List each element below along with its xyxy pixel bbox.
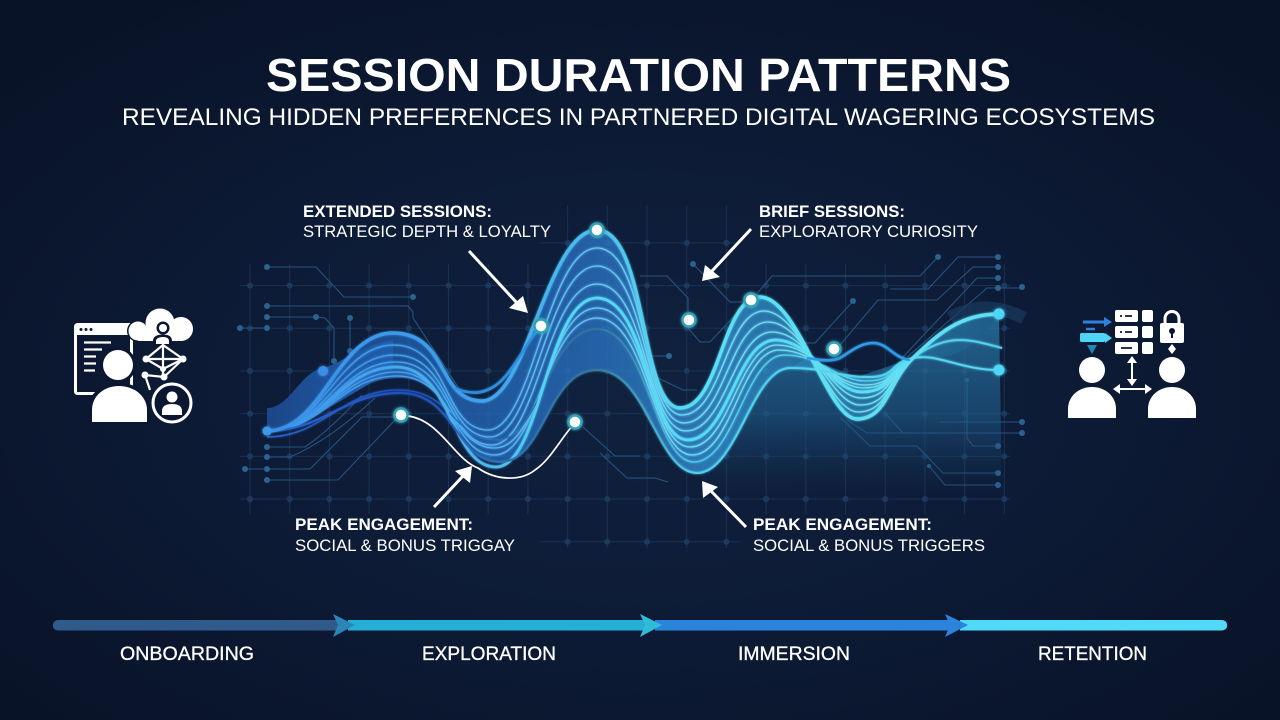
icon: users with data servers and lock: [1068, 310, 1196, 418]
callout: peak engagement right: PEAK ENGAGEMENT:: [753, 515, 932, 534]
callout: extended sessions: EXTENDED SESSIONS:: [303, 202, 492, 221]
icon: user with browser, cloud and network: [75, 308, 193, 424]
arrow: extended sessions: [469, 251, 528, 313]
left dark shape: [267, 340, 393, 431]
stage bar: exploration: [348, 614, 662, 637]
callout: peak engagement right: [753, 515, 985, 555]
stage bar: onboarding: [53, 614, 355, 637]
stage label: exploration: EXPLORATION: [422, 643, 556, 665]
right area glow: [950, 308, 1024, 318]
callout: peak engagement left: [295, 515, 515, 555]
callout: peak engagement right: SOCIAL & BONUS TRIGGERS: [753, 536, 985, 555]
circuit traces: [237, 254, 1025, 488]
arrow: peak engagement left: [434, 466, 472, 507]
stage label: immersion: IMMERSION: [738, 643, 850, 665]
data nodes: [262, 224, 1004, 436]
timeline: stage progression: [53, 614, 1227, 665]
callout: extended sessions: [303, 202, 551, 241]
chart: session duration waves: [237, 205, 1025, 548]
callout: extended sessions: STRATEGIC DEPTH & LOYALTY: [303, 222, 551, 241]
callout: brief sessions: BRIEF SESSIONS:: [759, 202, 905, 221]
wave lines: [267, 230, 1002, 473]
stage label: retention: RETENTION: [1038, 643, 1147, 665]
arrow: brief sessions: [702, 229, 751, 281]
callout: peak engagement left: PEAK ENGAGEMENT:: [295, 515, 473, 534]
title: SESSION DURATION PATTERNS: [266, 49, 1011, 101]
callout: brief sessions: EXPLORATORY CURIOSITY: [759, 222, 978, 241]
stage label: onboarding: ONBOARDING: [120, 643, 254, 665]
callout: brief sessions: [759, 202, 978, 241]
stage bar: retention: [960, 620, 1227, 630]
subtitle: REVEALING HIDDEN PREFERENCES IN PARTNERED DIGITAL WAGERING ECOSYSTEMS: [122, 104, 1155, 131]
stage bar: immersion: [655, 614, 968, 637]
callout: peak engagement left: SOCIAL & BONUS TRIGGAY: [295, 536, 515, 555]
wave band fill: [267, 230, 999, 473]
arrow: peak engagement right: [702, 481, 746, 527]
white engagement curve: [408, 416, 573, 478]
